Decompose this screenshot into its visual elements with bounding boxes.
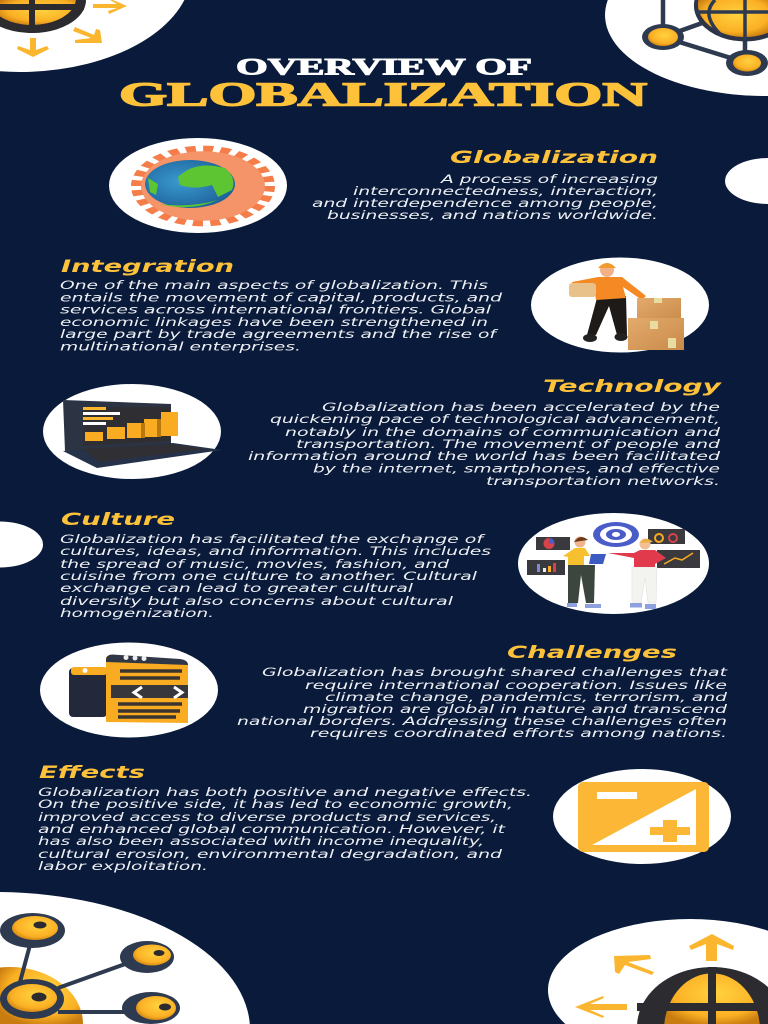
text: culture body: exchange can lead to greater cultural bbox=[60, 582, 414, 595]
text: culture body: the spread of music, movies, fashion, and bbox=[60, 558, 450, 571]
text: effects body: labor exploitation. bbox=[38, 860, 208, 873]
text: effects body: On the positive side, it has led to economic growth, bbox=[38, 798, 513, 811]
panel: technology bbox=[43, 377, 723, 488]
panel: culture bbox=[60, 510, 709, 620]
text: globalization body: A process of increasing bbox=[439, 173, 658, 186]
text: effects body: Globalization has both positive and negative effects. bbox=[38, 786, 532, 799]
panel: globalization bbox=[109, 138, 658, 233]
text: challenges body: climate change, pandemics, terrorism, and bbox=[325, 691, 728, 704]
text: technology body: by the internet, smartphones, and effective bbox=[313, 462, 720, 476]
icon: globe in gear bbox=[109, 138, 287, 233]
heading: effects: Effects bbox=[39, 763, 145, 782]
text: challenges body: requires coordinated efforts among nations. bbox=[310, 727, 727, 740]
decorative corner: bottom left network bbox=[0, 892, 250, 1024]
text: culture body bbox=[60, 533, 491, 620]
decorative corner: bottom right globe with arrows bbox=[548, 919, 768, 1024]
icon: plus minus bbox=[553, 769, 731, 864]
text: effects body: improved access to diverse products and services, bbox=[38, 811, 496, 824]
icon: browser windows bbox=[40, 642, 218, 738]
text: culture body: cultures, ideas, and information. This includes bbox=[60, 545, 491, 558]
text: integration body: large part by trade agreements and the rise of bbox=[60, 328, 499, 341]
text: challenges body: require international cooperation. Issues like bbox=[305, 679, 727, 692]
text: technology body: transportation networks. bbox=[486, 475, 720, 488]
heading: challenges: Challenges bbox=[507, 643, 677, 662]
text: globalization body bbox=[312, 173, 658, 222]
text: globalization body: and interdependence among people, bbox=[312, 197, 658, 210]
panel: challenges bbox=[40, 642, 728, 740]
text: technology body: notably in the domains of communication and bbox=[285, 426, 722, 439]
decorative corner: top right network bbox=[605, 0, 768, 96]
text: integration body: services across international frontiers. Global bbox=[60, 304, 493, 316]
icon: delivery man with boxes bbox=[531, 258, 709, 352]
text: culture body: diversity but also concerns about cultural bbox=[60, 595, 455, 608]
heading: technology: Technology bbox=[543, 377, 723, 396]
text: challenges body: Globalization has brought shared challenges that bbox=[262, 666, 728, 679]
text: technology body: transportation. The movement of people and bbox=[296, 438, 721, 451]
title: GLOBALIZATION bbox=[119, 76, 648, 114]
text: challenges body: national borders. Addressing these challenges often bbox=[237, 715, 727, 728]
text: globalization body: businesses, and nations worldwide. bbox=[327, 209, 658, 222]
heading: globalization: Globalization bbox=[450, 148, 658, 167]
text: culture body: Globalization has facilitated the exchange of bbox=[60, 533, 486, 546]
text: effects body: has also been associated with income inequality, bbox=[38, 835, 484, 848]
text: integration body: entails the movement of capital, products, and bbox=[60, 292, 504, 304]
panel: effects bbox=[38, 763, 731, 873]
text: integration body: One of the main aspects of globalization. This bbox=[60, 279, 488, 292]
text: globalization body: interconnectedness, interaction, bbox=[353, 185, 658, 198]
text: effects body: cultural erosion, environmental degradation, and bbox=[38, 848, 503, 861]
side blob left bbox=[0, 522, 43, 568]
text: culture body: cuisine from one culture to another. Cultural bbox=[60, 570, 478, 583]
text: integration body bbox=[60, 279, 504, 354]
text: technology body: Globalization has been accelerated by the bbox=[322, 401, 720, 414]
text: technology body bbox=[248, 401, 722, 488]
title bbox=[119, 54, 648, 114]
text: challenges body bbox=[237, 666, 728, 740]
title: OVERVIEW OF bbox=[236, 54, 532, 80]
decorative corner: top left globe with arrows bbox=[0, 0, 184, 72]
icon: two people with target and charts bbox=[518, 513, 709, 614]
text: effects body bbox=[38, 786, 532, 873]
panel: integration bbox=[60, 257, 709, 354]
text: integration body: multinational enterprises. bbox=[60, 340, 301, 354]
text: integration body: economic linkages have been strengthened in bbox=[60, 316, 488, 329]
icon: laptop with bar chart bbox=[43, 384, 222, 479]
heading: integration: Integration bbox=[61, 257, 234, 276]
text: effects body: and enhanced global communication. However, it bbox=[38, 823, 506, 836]
heading: culture: Culture bbox=[61, 510, 175, 529]
text: technology body: information around the world has been facilitated bbox=[248, 450, 722, 463]
text: technology body: quickening pace of technological advancement, bbox=[270, 413, 720, 426]
text: challenges body: migration are global in nature and transcend bbox=[303, 703, 728, 716]
text: culture body: homogenization. bbox=[60, 607, 214, 620]
side blob right bbox=[725, 158, 768, 204]
